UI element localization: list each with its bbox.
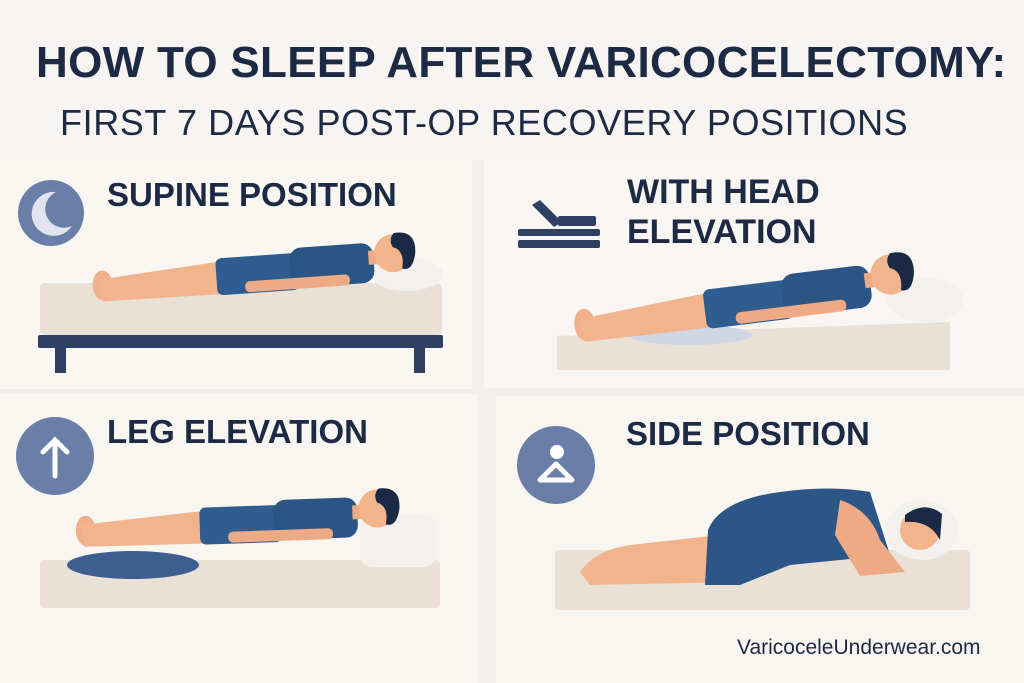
person [75, 488, 401, 549]
panel: supine [18, 180, 443, 373]
panel: leg elevation [16, 417, 440, 608]
mattress [555, 550, 970, 610]
leg pillow [67, 551, 199, 579]
person [570, 250, 918, 345]
mattress [40, 283, 442, 335]
icon: side person [517, 426, 595, 504]
icon: arrow up [16, 417, 94, 495]
icon: moon [18, 180, 84, 246]
pillow [371, 257, 443, 291]
title: HOW TO SLEEP AFTER VARICOCELECTOMY: [36, 38, 1006, 87]
person [90, 231, 418, 304]
heading: leg elevation: LEG ELEVATION [107, 413, 368, 450]
pillow [886, 500, 958, 560]
heading: supine: SUPINE POSITION [107, 176, 397, 213]
heading: side: SIDE POSITION [626, 415, 870, 452]
heading: head elevation [627, 173, 820, 251]
footer url: VaricoceleUnderwear.com [737, 636, 981, 659]
title: FIRST 7 DAYS POST-OP RECOVERY POSITIONS [60, 102, 908, 143]
mattress [557, 322, 950, 370]
title [36, 38, 1006, 143]
mattress [40, 560, 440, 608]
knee pillow [628, 325, 752, 345]
panel: head elevation [518, 200, 963, 370]
pillow [887, 278, 963, 322]
heading: head elevation: ELEVATION [627, 213, 817, 251]
pillow [360, 515, 436, 567]
panel: side [517, 426, 970, 610]
person [580, 488, 942, 585]
bed frame [38, 335, 443, 373]
heading: head elevation: WITH HEAD [627, 173, 820, 211]
icon: adjustable bed [518, 200, 600, 248]
